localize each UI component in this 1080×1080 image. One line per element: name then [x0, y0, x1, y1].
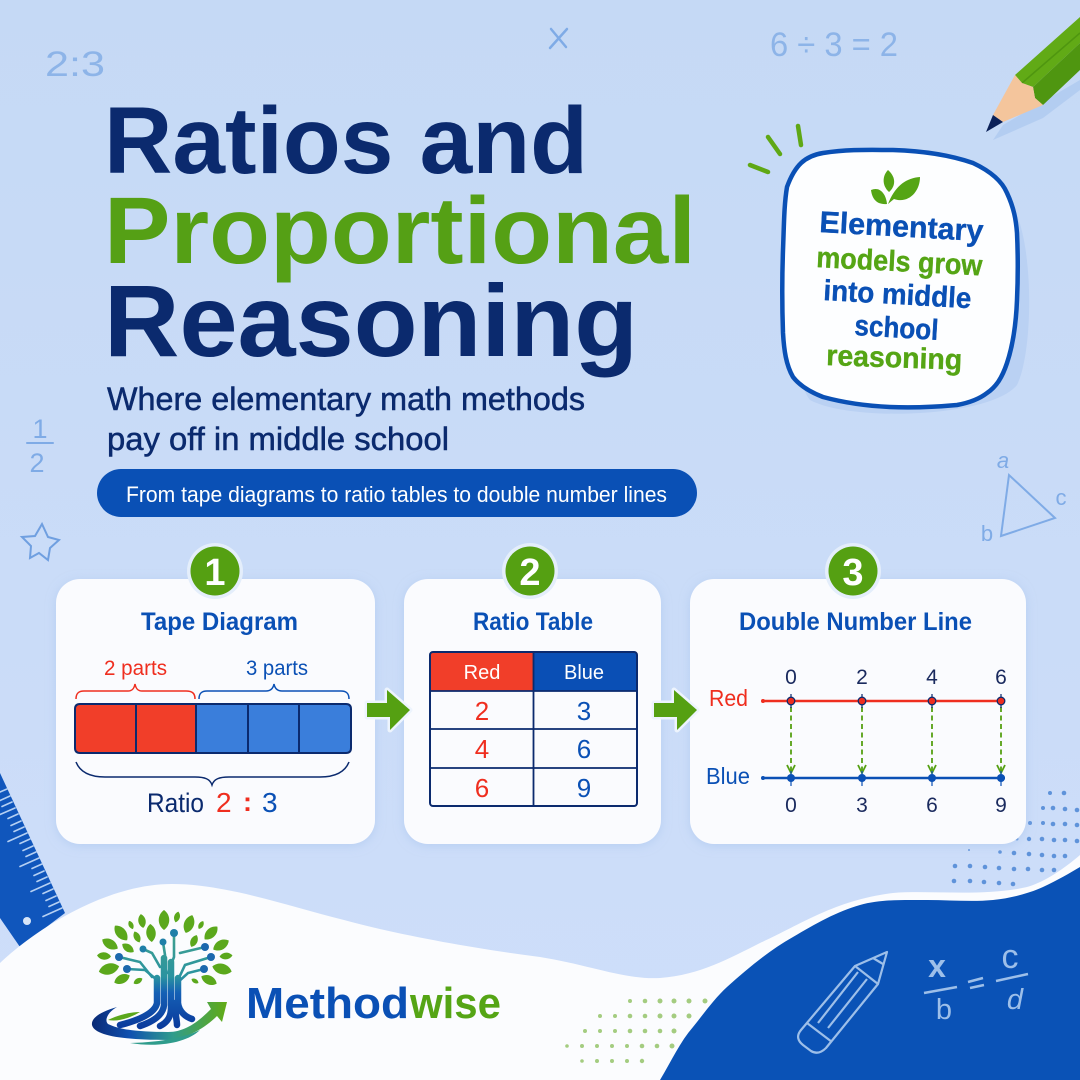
- table: 3: [577, 696, 591, 726]
- step badge 1: [187, 543, 243, 599]
- callout text: models grow: [816, 242, 983, 282]
- pill banner: [97, 469, 697, 517]
- tree trunk and roots: [120, 958, 192, 1026]
- math note: proportion: b: [936, 994, 952, 1026]
- ratio label: 3: [262, 787, 278, 818]
- math note: one half: [27, 414, 53, 478]
- step badge 1: 1: [204, 552, 226, 594]
- ratio label: Ratio: [147, 788, 204, 818]
- top values: 4: [926, 666, 938, 689]
- green dot pattern: [565, 998, 708, 1063]
- table: 6: [475, 773, 489, 803]
- white footer wave: [0, 855, 1080, 1080]
- callout text: school: [854, 310, 939, 347]
- step badge 3: [825, 543, 881, 599]
- panel: double number line: Blue: [706, 763, 750, 789]
- subtitle: pay off in middle school: [107, 421, 449, 457]
- decorative math symbols: [22, 26, 1066, 560]
- tree leaves: [97, 910, 233, 988]
- panel: double number line: [690, 543, 1026, 844]
- icon: outlined pencil: [798, 952, 887, 1053]
- triangle with labelled sides: [981, 448, 1066, 546]
- card: [404, 579, 661, 844]
- math note: proportion: [924, 938, 1028, 1026]
- brand name: wise: [409, 979, 501, 1028]
- swoosh with arrow: [92, 1002, 227, 1040]
- math note: one half: 1: [32, 414, 48, 444]
- math note: proportion: d: [1007, 984, 1024, 1016]
- ratio label: 2: [216, 787, 232, 818]
- triangle with labelled sides: a: [997, 448, 1009, 473]
- table: Blue: [564, 662, 604, 684]
- bottom values: 3: [856, 794, 868, 817]
- callout text: into middle: [823, 275, 972, 315]
- callout text: Elementary: [819, 206, 985, 248]
- blue corner wave: [660, 867, 1080, 1080]
- panel: tape diagram: [56, 543, 375, 844]
- lower swoosh: [130, 1030, 200, 1045]
- step badge 2: 2: [519, 552, 541, 594]
- callout bubble: [782, 150, 1018, 407]
- logo: Methodwise tree: [92, 910, 233, 1045]
- top values: 0: [785, 666, 797, 689]
- bottom values: [785, 794, 1007, 817]
- step badge 2: [502, 543, 558, 599]
- callout: key message: [750, 126, 1029, 414]
- label: 2 parts: 2 parts: [104, 657, 167, 680]
- math note: proportion: x: [928, 948, 946, 984]
- icon: green pencil: [986, 17, 1080, 140]
- tree nodes: [140, 929, 178, 952]
- card: [690, 579, 1026, 844]
- title line: Proportional: Proportional: [104, 178, 696, 284]
- icon: sprout: [871, 170, 920, 204]
- blue line: [761, 771, 1005, 786]
- ratio label: :: [243, 787, 252, 817]
- label: 3 parts: 3 parts: [246, 657, 308, 680]
- bottom values: 0: [785, 794, 797, 817]
- table: 6: [577, 734, 591, 764]
- callout rays: [750, 126, 801, 172]
- triangle with labelled sides: c: [1056, 485, 1066, 510]
- series labels: Red: [709, 685, 748, 711]
- tree branches: [119, 933, 211, 983]
- dot pattern right: [952, 791, 1079, 886]
- callout text: reasoning: [826, 340, 963, 377]
- card heading: Double Number Line: [739, 608, 972, 636]
- table: [430, 652, 637, 806]
- title line: Reasoning: Reasoning: [104, 264, 638, 378]
- table text: Red: [464, 662, 500, 684]
- math note: one half: 2: [29, 448, 45, 478]
- brand name: Method: [246, 979, 409, 1028]
- math note: 6 divided by 3: 6 ÷ 3 = 2: [770, 26, 898, 64]
- subtitle: [107, 381, 585, 457]
- title: [104, 88, 696, 378]
- red line: [761, 694, 1005, 708]
- brand name: [246, 979, 501, 1028]
- tape bar: [75, 704, 351, 753]
- top values: 6: [995, 666, 1007, 689]
- multiplication sign: [550, 29, 567, 48]
- card heading: Ratio Table: [473, 608, 593, 636]
- star outline: [22, 524, 59, 560]
- panel: ratio table: [404, 543, 661, 844]
- arrow: step 1 to 2: [367, 690, 410, 730]
- card: [56, 579, 375, 844]
- arrow: step 2 to 3: [654, 690, 697, 730]
- math note: 2:3: 2:3: [45, 45, 105, 84]
- subtitle: Where elementary math methods: [107, 381, 585, 417]
- table header: [430, 652, 534, 691]
- table: 2: [475, 696, 489, 726]
- pill banner: From tape diagrams to ratio tables to double number lines: [126, 482, 667, 507]
- title line: Ratios and: Ratios and: [104, 88, 588, 194]
- triangle with labelled sides: b: [981, 521, 993, 546]
- bottom values: 6: [926, 794, 938, 817]
- card heading: Tape Diagram: [141, 608, 298, 636]
- top values: 2: [856, 666, 868, 689]
- math note: proportion: c: [1002, 938, 1018, 976]
- top values: [785, 666, 1007, 689]
- ruler: [0, 773, 65, 947]
- table: 9: [577, 773, 591, 803]
- brackets: [76, 684, 349, 785]
- bottom values: 9: [995, 794, 1007, 817]
- table: 4: [475, 734, 489, 764]
- step badge 3: 3: [842, 552, 864, 594]
- callout shadow: [790, 162, 1029, 414]
- dashed connectors: [787, 707, 1005, 773]
- ratio label: [147, 787, 278, 818]
- left leaf stroke: [108, 1012, 140, 1021]
- callout text: [816, 206, 985, 377]
